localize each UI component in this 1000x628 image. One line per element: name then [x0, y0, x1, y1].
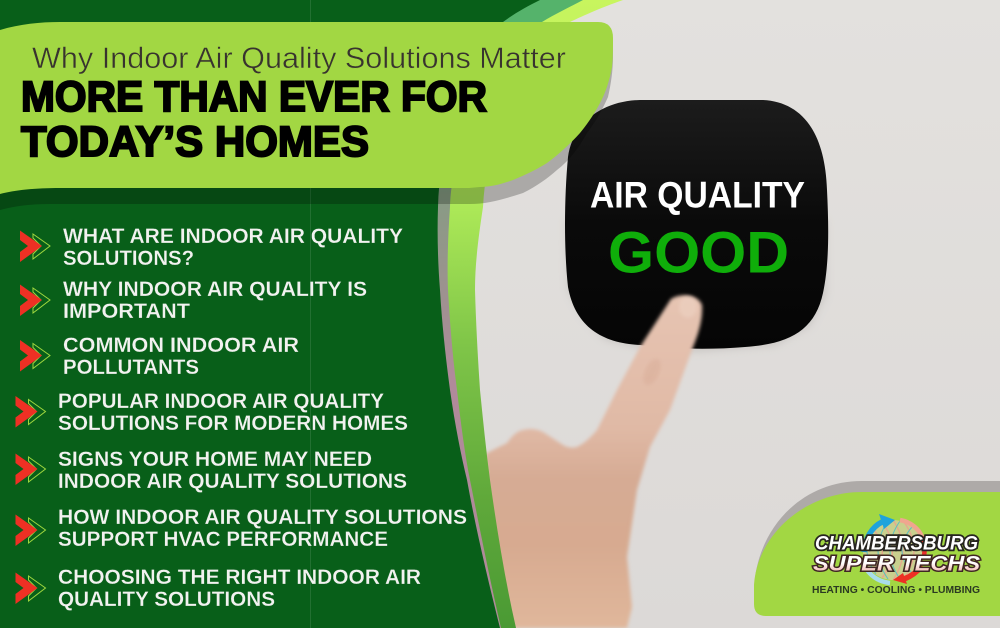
list item 6: HOW INDOOR AIR QUALITY SOLUTIONS [58, 506, 467, 529]
list item 1 [20, 225, 403, 270]
icon: chevrons [20, 230, 50, 262]
list item 7: QUALITY SOLUTIONS [58, 588, 275, 611]
icon: chevrons [16, 396, 46, 428]
list item 5: INDOOR AIR QUALITY SOLUTIONS [58, 470, 407, 493]
panel: header [0, 22, 613, 194]
icon: chevrons [20, 284, 50, 316]
logo panel shadow [754, 481, 1000, 600]
list item 2: IMPORTANT [63, 300, 190, 323]
list item 3 [20, 334, 299, 379]
icon: chevrons [20, 340, 50, 372]
curved band: lime [0, 0, 623, 628]
list item 4: POPULAR INDOOR AIR QUALITY [58, 390, 384, 413]
list item 5: SIGNS YOUR HOME MAY NEED [58, 448, 372, 471]
label: air quality: AIR QUALITY [590, 174, 805, 216]
subtitle: Why Indoor Air Quality Solutions Matter [32, 42, 566, 75]
list item 3: COMMON INDOOR AIR [63, 334, 299, 357]
list item 5 [16, 448, 407, 493]
list item 4 [16, 390, 408, 435]
label: good: GOOD [608, 220, 789, 286]
list item 3: POLLUTANTS [63, 356, 199, 379]
list item 6: SUPPORT HVAC PERFORMANCE [58, 528, 388, 551]
logo wordmark: super techs: SUPER TECHS [813, 552, 980, 576]
panel: logo [754, 492, 1000, 616]
icon: circular arrows globe [863, 514, 925, 584]
title line 2: TODAY’S HOMES [21, 118, 369, 166]
list item 4: SOLUTIONS FOR MODERN HOMES [58, 412, 408, 435]
list item 2 [20, 278, 367, 323]
header shadow [0, 38, 613, 210]
list item 7: CHOOSING THE RIGHT INDOOR AIR [58, 566, 421, 589]
list item 1: SOLUTIONS? [63, 247, 194, 270]
icon: chevrons [16, 572, 46, 604]
photo: thermostat device [565, 100, 828, 352]
icon: chevrons [16, 514, 46, 546]
curved band: translucent edge [0, 0, 583, 628]
photo: pointing hand [485, 295, 702, 628]
icon: chevrons [16, 454, 46, 485]
panel: dark green background [0, 0, 540, 628]
title line 1: MORE THAN EVER FOR [21, 73, 487, 121]
logo tagline: HEATING • COOLING • PLUMBING [812, 584, 980, 596]
list item 7 [16, 566, 421, 611]
list item 1: WHAT ARE INDOOR AIR QUALITY [63, 225, 403, 248]
list item 2: WHY INDOOR AIR QUALITY IS [63, 278, 367, 301]
logo wordmark: chambersburg: CHAMBERSBURG [815, 534, 978, 554]
list item 6 [16, 506, 467, 551]
